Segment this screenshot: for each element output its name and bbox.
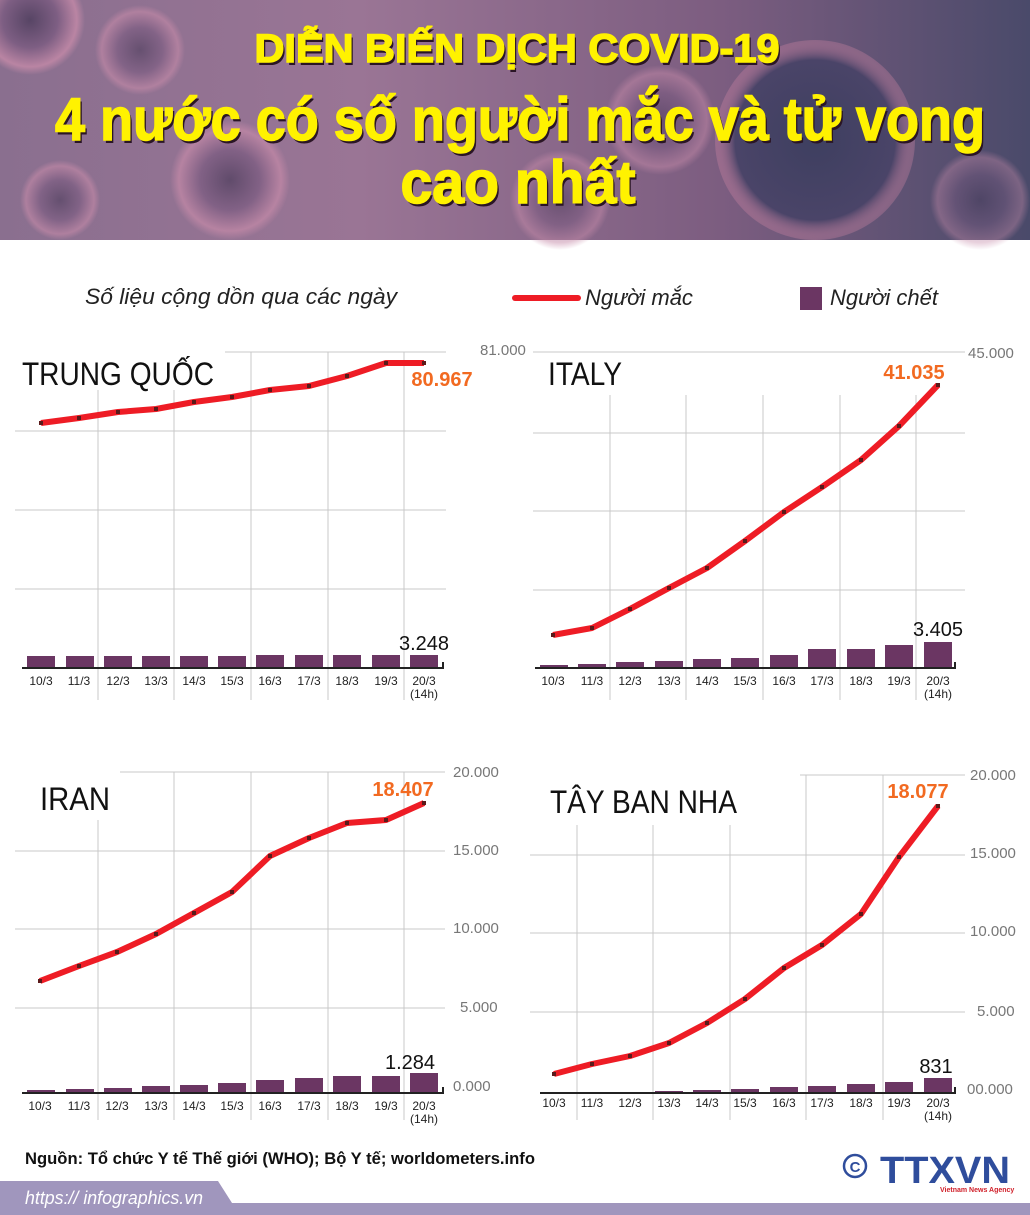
panel: Italy: 20/3 [926,674,950,688]
panel: Italy: 12/3 [618,674,642,688]
panel: Italy: 15/3 [733,674,757,688]
panel: Iran: 1.284 [385,1052,435,1074]
panel: Tay Ban Nha: TÂY BAN NHA [550,784,738,820]
panel: Trung Quoc: 13/3 [144,674,168,688]
panel: Trung Quoc: 81.000 [480,342,526,359]
panel: Iran: 10.000 [453,920,499,937]
panel: Italy: 41.035 [883,362,945,384]
panel: Trung Quoc: 12/3 [106,674,130,688]
panel: Tay Ban Nha: 10/3 [542,1096,566,1110]
title: cao nhất [402,152,638,219]
panel: Trung Quoc: (14h) [410,687,438,701]
logo: TTXVN: C [850,1159,861,1176]
title: cao nhất [400,149,636,216]
panel: Trung Quoc: 3.248 [399,633,449,655]
panel: Italy: 17/3 [810,674,834,688]
panel: Tay Ban Nha: 00.000 [967,1081,1013,1098]
panel: Tay Ban Nha: 15.000 [970,845,1016,862]
footer band [0,1181,1030,1215]
panel: Italy: 3.405 [913,619,963,641]
panel: Tay Ban Nha: 14/3 [695,1096,719,1110]
panel: Iran: 12/3 [105,1099,129,1113]
legend: Người chết [830,285,939,310]
title: DIỄN BIẾN DỊCH COVID-19 [256,28,782,74]
legend [85,284,939,310]
panel: Trung Quoc: 20/3 [412,674,436,688]
panel: Iran: 0.000 [453,1078,491,1095]
panel: Italy: 11/3 [581,674,604,688]
panel: Iran: 20/3 [412,1099,436,1113]
panel: Trung Quoc: 10/3 [29,674,53,688]
panel: Italy: 45.000 [968,345,1014,362]
panel: Tay Ban Nha: 5.000 [977,1003,1015,1020]
title [55,25,987,219]
panel: Tay Ban Nha: 13/3 [657,1096,681,1110]
panel: Italy: ITALY [548,356,622,392]
logo: TTXVN: TTXVN [880,1150,1010,1192]
panel: Trung Quoc: 16/3 [258,674,282,688]
panel: Tay Ban Nha: 16/3 [772,1096,796,1110]
legend: Số liệu cộng dồn qua các ngày [85,284,399,309]
panel: Trung Quoc: 11/3 [68,674,91,688]
panel: Italy: 14/3 [695,674,719,688]
source note: Nguồn: Tổ chức Y tế Thế giới (WHO); Bộ Y tế; worldometers.info [25,1149,535,1168]
panel: Iran: 20.000 [453,764,499,781]
panel: Trung Quoc [15,342,526,701]
logo: TTXVN: Vietnam News Agency [940,1187,1014,1194]
panel: Trung Quoc: 18/3 [335,674,359,688]
panel: Tay Ban Nha: 15/3 [733,1096,757,1110]
panel: Tay Ban Nha [530,767,1016,1123]
panel: Iran: 13/3 [144,1099,168,1113]
panel: Trung Quoc: 15/3 [220,674,244,688]
panel: Tay Ban Nha: 12/3 [618,1096,642,1110]
panel: Iran: 17/3 [297,1099,321,1113]
panel: Iran: (14h) [410,1112,438,1126]
panel: Iran: IRAN [40,781,110,817]
panel: Iran: 18.407 [372,779,434,801]
panel: Iran: 5.000 [460,999,498,1016]
logo: TTXVN [844,1150,1014,1194]
panel: Tay Ban Nha: 20.000 [970,767,1016,784]
panel: Iran: 10/3 [28,1099,52,1113]
panel: Iran: 15/3 [220,1099,244,1113]
panel: Iran: 15.000 [453,842,499,859]
panel: Tay Ban Nha: 18/3 [849,1096,873,1110]
panel: Italy [533,345,1014,701]
panel: Tay Ban Nha: 19/3 [887,1096,911,1110]
panel: Tay Ban Nha: 831 [919,1056,953,1078]
panel: Tay Ban Nha: 10.000 [970,923,1016,940]
panel: Trung Quoc: TRUNG QUỐC [22,356,214,392]
panel: Italy: 18/3 [849,674,873,688]
panel: Tay Ban Nha: 17/3 [810,1096,834,1110]
panel: Trung Quoc: 19/3 [374,674,398,688]
panel: Iran: 18/3 [335,1099,359,1113]
panel: Tay Ban Nha: 18.077 [887,781,949,803]
panel: Iran: 16/3 [258,1099,282,1113]
panel: Italy: 13/3 [657,674,681,688]
panel: Iran: 19/3 [374,1099,398,1113]
panel: Tay Ban Nha: 11/3 [581,1096,604,1110]
legend: Người mắc [585,285,693,310]
header banner [0,0,1030,250]
panel: Tay Ban Nha: (14h) [924,1109,952,1123]
panel: Tay Ban Nha: 20/3 [926,1096,950,1110]
title: DIỄN BIẾN DỊCH COVID-19 [254,25,780,71]
panel: Iran [15,764,499,1126]
panel: Iran: 11/3 [68,1099,91,1113]
panel: Iran: 14/3 [182,1099,206,1113]
panel: Trung Quoc: 80.967 [411,369,473,391]
panel: Trung Quoc: 14/3 [182,674,206,688]
panel: Trung Quoc: 17/3 [297,674,321,688]
panel: Italy: 10/3 [541,674,565,688]
panel: Italy: (14h) [924,687,952,701]
footer band: https:// infographics.vn [25,1188,203,1208]
panel: Italy: 16/3 [772,674,796,688]
panel: Italy: 19/3 [887,674,911,688]
